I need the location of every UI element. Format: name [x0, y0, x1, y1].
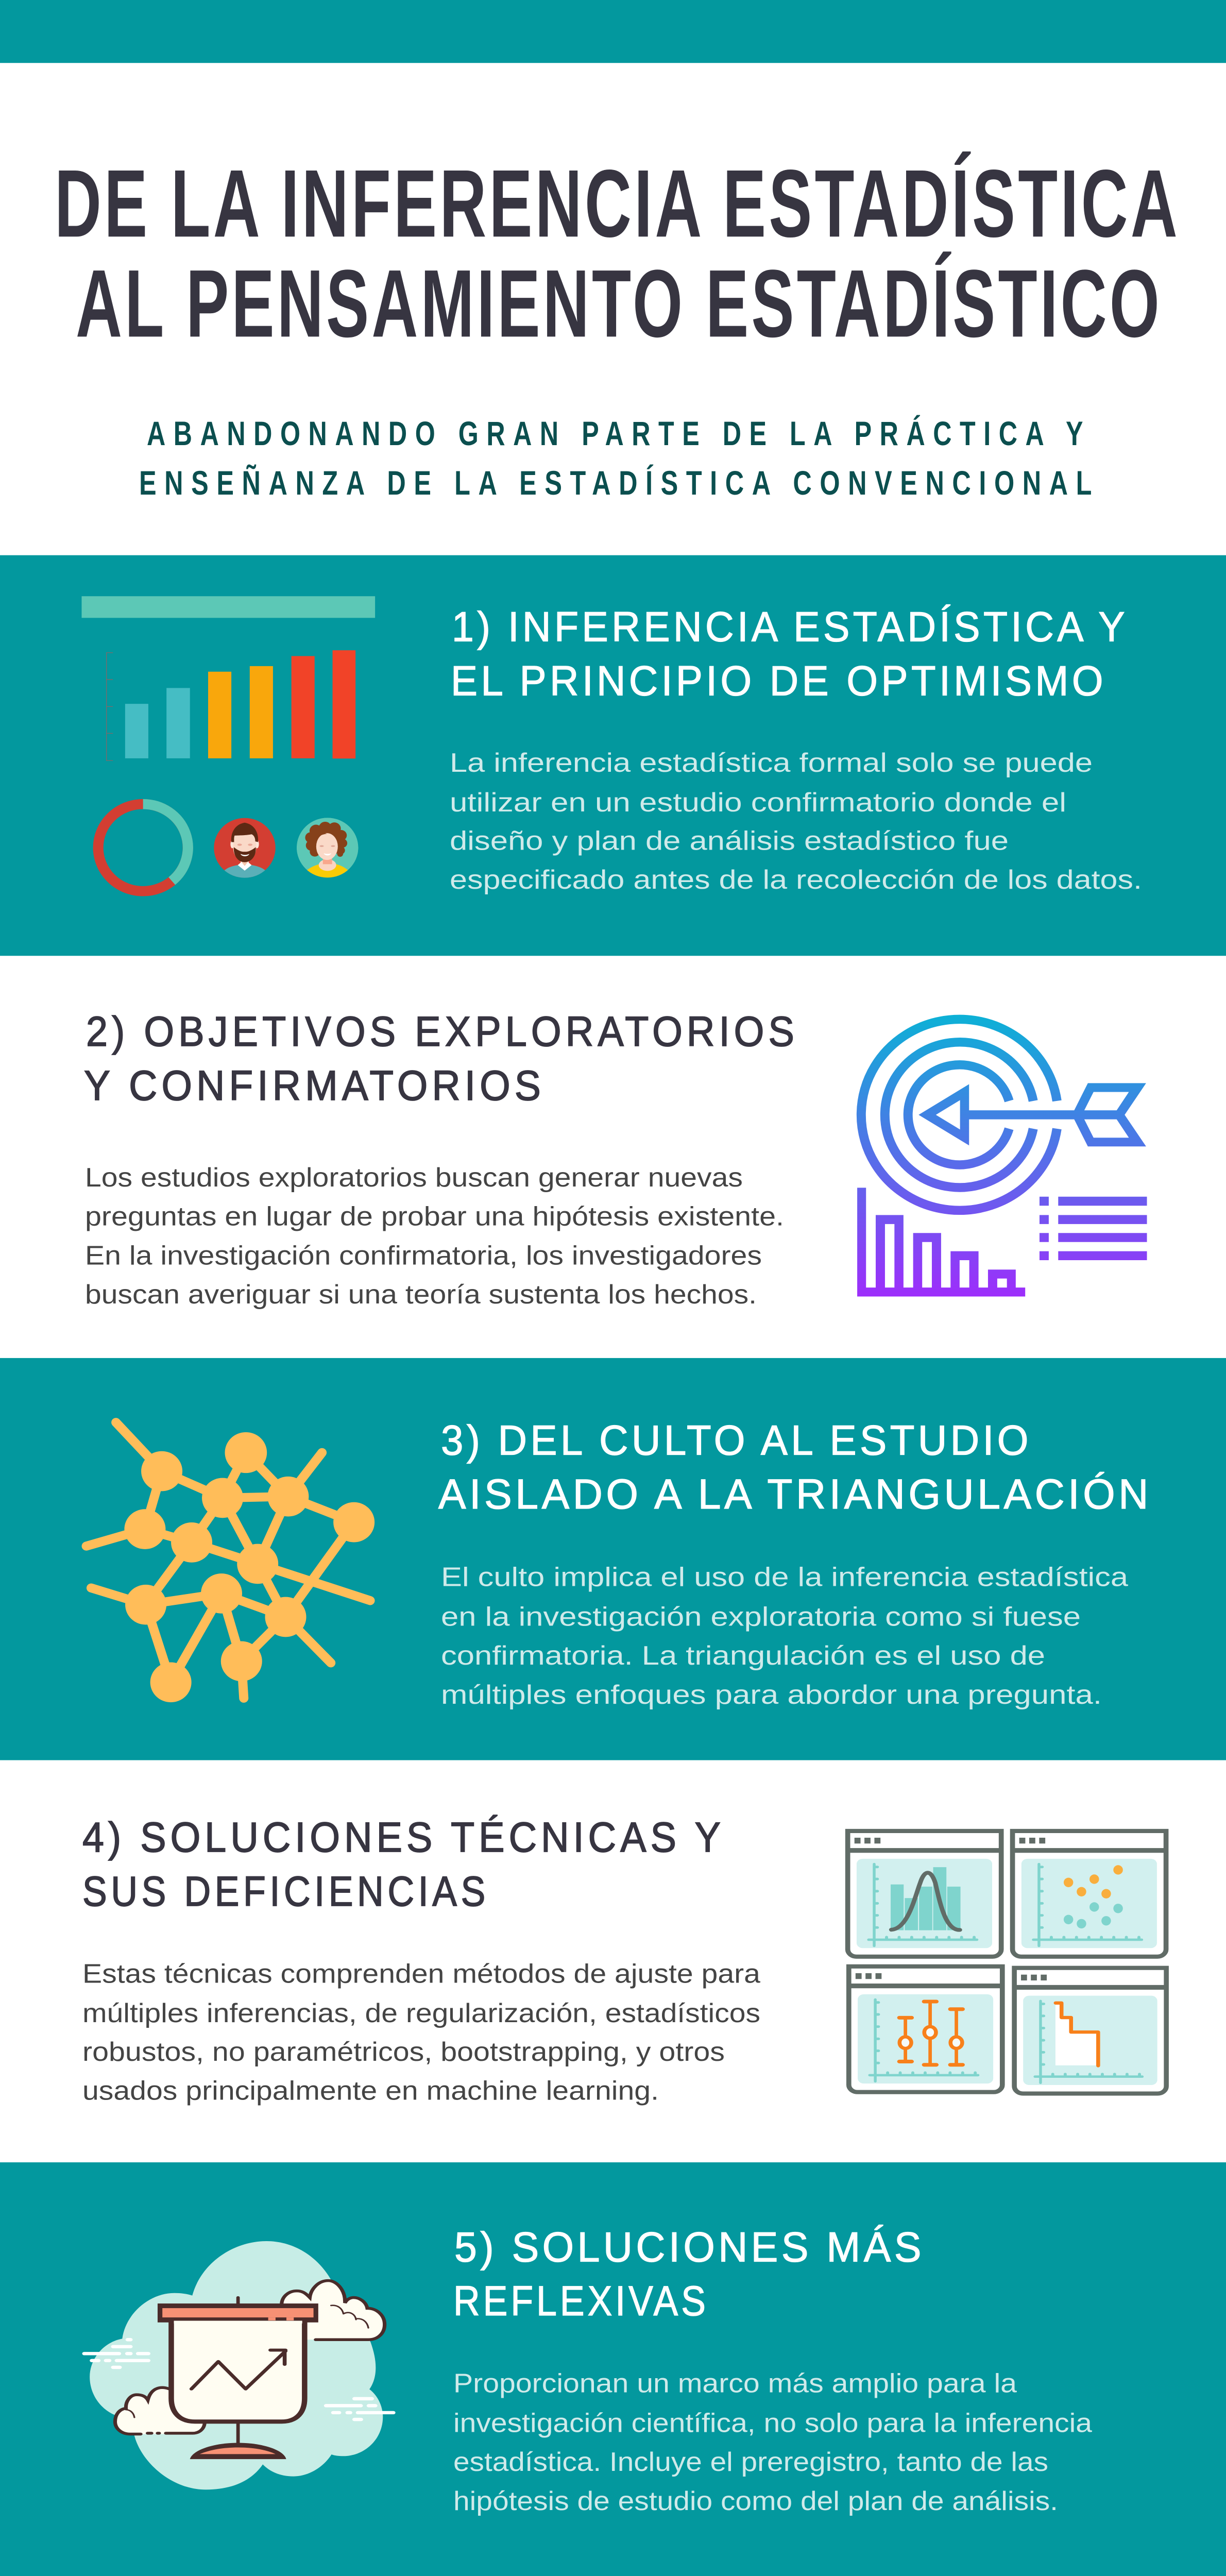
body text — [450, 749, 1142, 895]
mini bar chart — [857, 1188, 1025, 1297]
heading: AISLADO A LA TRIANGULACIÓN — [438, 1470, 1152, 1518]
body text: especificado antes de la recolección de los datos. — [450, 866, 1142, 895]
panel: section 4 — [0, 1760, 1226, 2162]
top teal bar — [0, 0, 1226, 63]
window: scatter plot — [1013, 1831, 1166, 1957]
body text: Proporcionan un marco más amplio para la — [453, 2369, 1017, 2399]
heading — [438, 1416, 1152, 1518]
panel: section 3 — [0, 1358, 1226, 1760]
window: error bars — [849, 1967, 1002, 2092]
header strip — [81, 596, 375, 618]
heading: Y CONFIRMATORIOS — [84, 1062, 545, 1109]
icon: target, arrow, bars and list — [857, 1019, 1147, 1297]
body text: En la investigación confirmatoria, los investigadores — [85, 1241, 762, 1270]
avatar: man — [214, 818, 276, 879]
title — [55, 150, 1180, 358]
body text — [85, 1163, 784, 1310]
body text: utilizar en un estudio confirmatorio donde el — [450, 788, 1066, 818]
body text — [82, 1959, 761, 2106]
heading: 3) DEL CULTO AL ESTUDIO — [441, 1416, 1032, 1464]
heading — [84, 1008, 798, 1109]
body text — [441, 1563, 1129, 1710]
body text: La inferencia estadística formal solo se puede — [450, 749, 1093, 778]
background cloud — [90, 2241, 383, 2489]
body text: usados principalmente en machine learning. — [82, 2076, 659, 2106]
panel: section 1 — [0, 555, 1226, 956]
small cloud right — [282, 2281, 385, 2340]
panel: header — [0, 63, 1226, 555]
body text: en la investigación exploratoria como si fuese — [441, 1602, 1081, 1632]
heading: 4) SOLUCIONES TÉCNICAS Y — [82, 1814, 725, 1861]
body text: investigación científica, no solo para la inferencia — [453, 2409, 1093, 2438]
heading — [82, 1814, 725, 1915]
icon: presentation board with clouds — [84, 2241, 393, 2489]
icon: network graph — [87, 1422, 374, 1702]
heading: 1) INFERENCIA ESTADÍSTICA Y — [452, 603, 1128, 650]
stand — [190, 2297, 286, 2459]
bar chart — [107, 650, 355, 760]
wind dashes — [84, 2340, 393, 2419]
body text: múltiples enfoques para abordor una pregunta. — [441, 1680, 1102, 1710]
body text: hipótesis de estudio como del plan de análisis. — [453, 2487, 1058, 2516]
body text: múltiples inferencias, de regularización, estadísticos — [82, 1999, 760, 2028]
board header — [158, 2303, 318, 2324]
panel: section 5 — [0, 2162, 1226, 2576]
panel: section 2 — [0, 956, 1226, 1358]
list lines — [1040, 1197, 1147, 1260]
network links — [87, 1422, 370, 1698]
body text: preguntas en lugar de probar una hipótesis existente. — [85, 1202, 784, 1231]
subtitle — [139, 415, 1100, 502]
rising line arrow — [192, 2350, 285, 2389]
heading — [453, 2223, 925, 2325]
network nodes — [124, 1432, 374, 1702]
target rings — [861, 1019, 1057, 1210]
arrow — [918, 1083, 1146, 1146]
body text — [453, 2369, 1093, 2516]
icon: four chart windows — [848, 1831, 1166, 2094]
window: step chart — [1014, 1968, 1166, 2094]
board — [171, 2320, 304, 2421]
avatar: woman — [297, 818, 359, 879]
body text: estadística. Incluye el preregistro, tanto de las — [453, 2448, 1048, 2477]
heading: REFLEXIVAS — [453, 2277, 709, 2325]
heading: 2) OBJETIVOS EXPLORATORIOS — [86, 1008, 798, 1055]
body text: Estas técnicas comprenden métodos de ajuste para — [82, 1959, 761, 1989]
body text: confirmatoria. La triangulación es el uso de — [441, 1641, 1045, 1671]
heading — [451, 603, 1128, 704]
small cloud left — [115, 2387, 205, 2434]
body text: El culto implica el uso de la inferencia estadística — [441, 1563, 1129, 1592]
window: histogram with curve — [848, 1831, 1001, 1957]
body text: Los estudios exploratorios buscan generar nuevas — [85, 1163, 743, 1193]
icon: dashboard with bars, donut and avatars — [81, 596, 375, 891]
body text: robustos, no paramétricos, bootstrapping, y otros — [82, 2038, 725, 2067]
heading: 5) SOLUCIONES MÁS — [454, 2223, 925, 2270]
heading: SUS DEFICIENCIAS — [82, 1868, 489, 1915]
heading: EL PRINCIPIO DE OPTIMISMO — [451, 657, 1106, 704]
donut chart — [98, 804, 188, 891]
body text: diseño y plan de análisis estadístico fue — [450, 826, 1009, 856]
body text: buscan averiguar si una teoría sustenta los hechos. — [85, 1280, 757, 1310]
